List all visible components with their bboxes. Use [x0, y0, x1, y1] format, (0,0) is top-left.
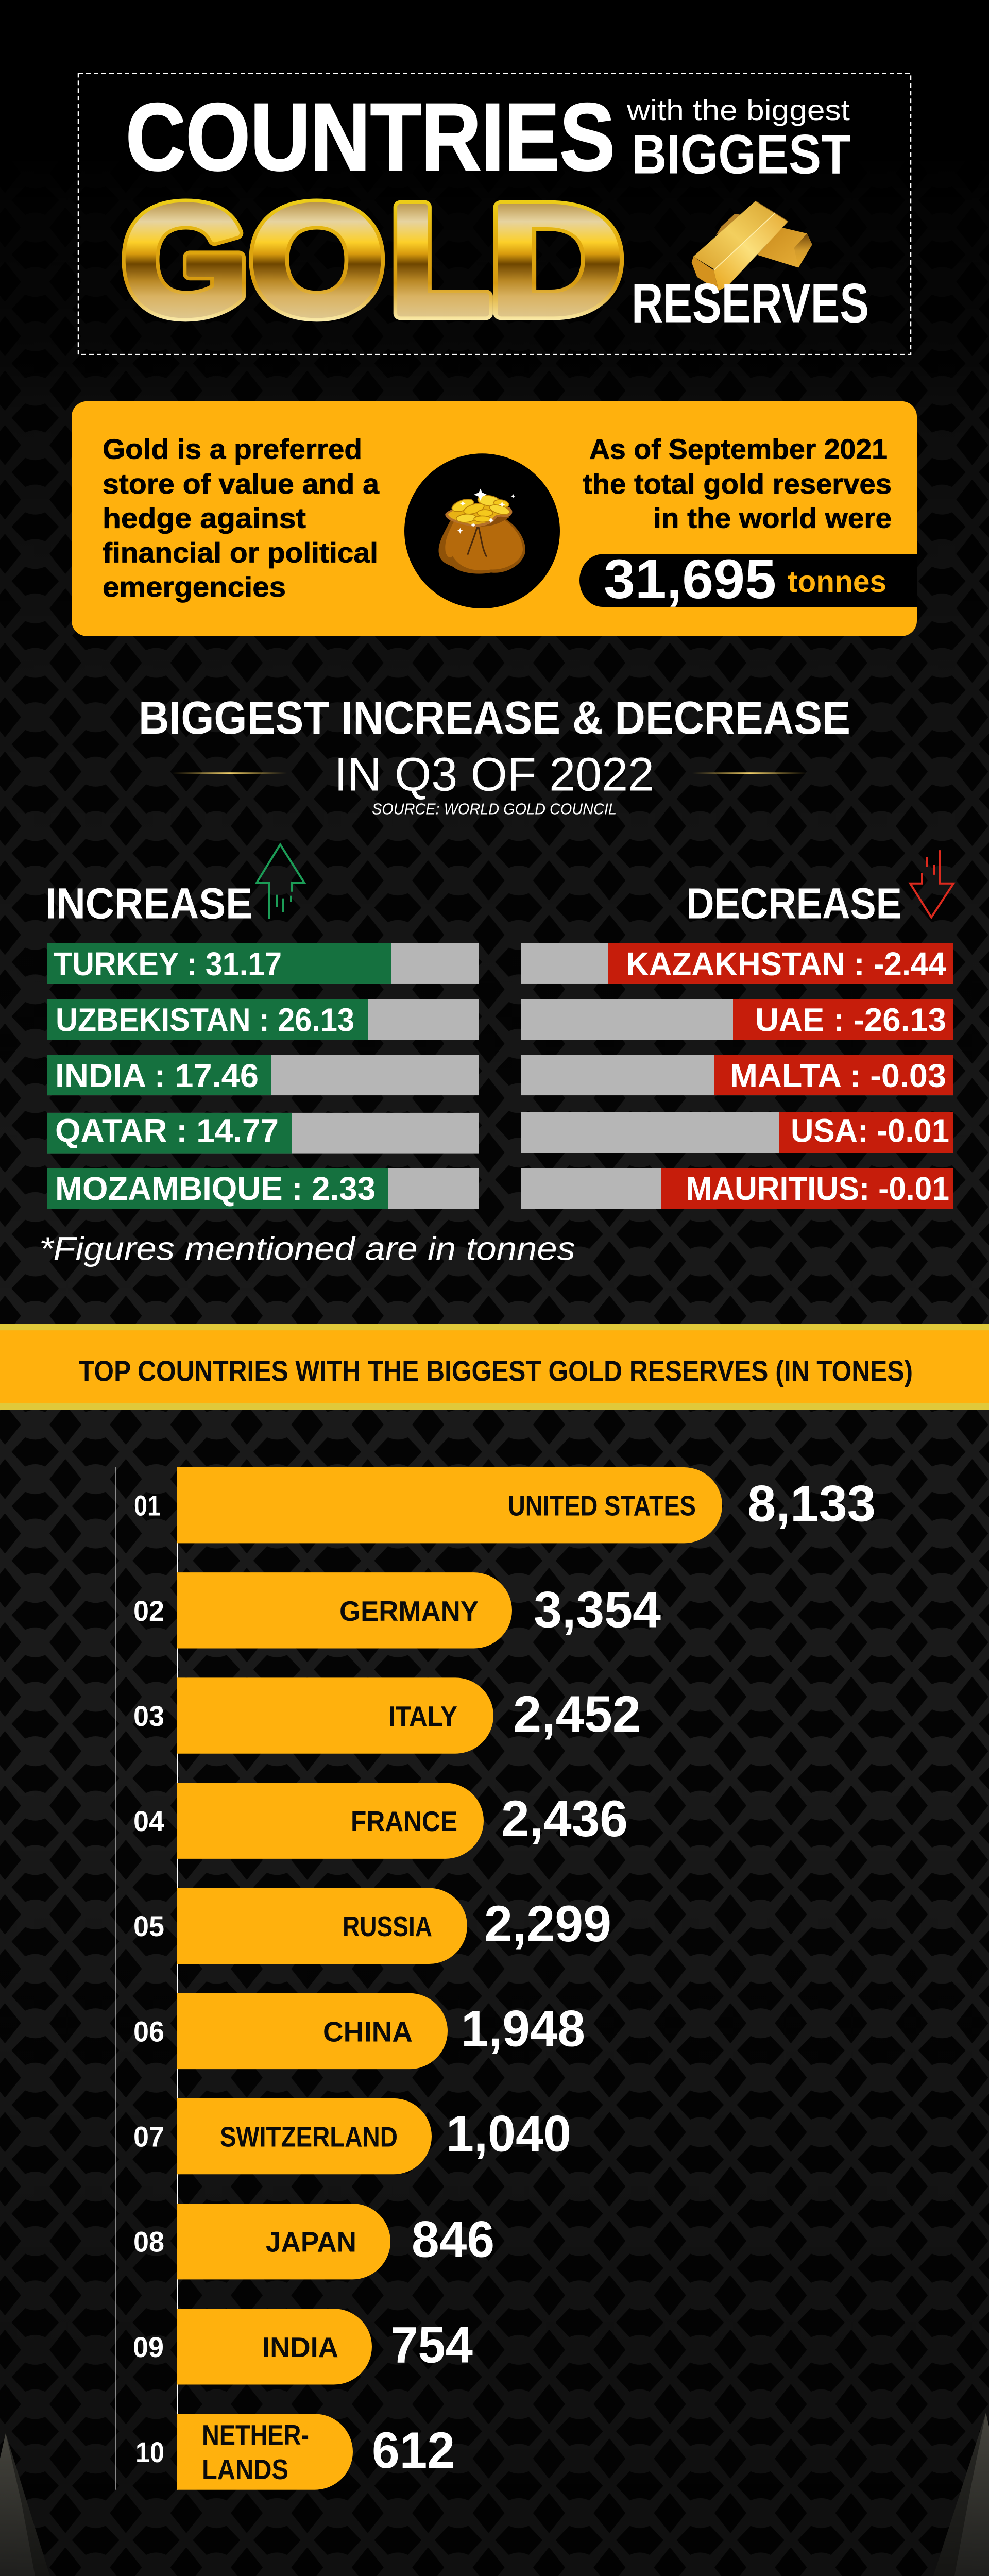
- text block: as of September 2021: [583, 433, 892, 534]
- row 03: Italy: 2,452: [513, 1686, 641, 1743]
- row 08: Japan: JAPAN: [266, 2226, 356, 2258]
- bar: Kazakhstan: [521, 943, 953, 984]
- bar: Malta: [521, 1055, 953, 1095]
- text block: gold is a preferred store: hedge against: [103, 502, 306, 534]
- bar: Mozambique: MOZAMBIQUE : 2.33: [55, 1170, 376, 1207]
- title: GOLD metallic lettering: L: [389, 173, 491, 346]
- callout: total reserves figure: [579, 548, 917, 610]
- heading: decrease: DECREASE: [686, 879, 902, 927]
- bar: Turkey: TURKEY : 31.17: [54, 945, 282, 982]
- bar: Uzbekistan: UZBEKISTAN : 26.13: [56, 1002, 354, 1039]
- row 01: United States: [134, 1467, 876, 1543]
- row 09: India: 09: [133, 2331, 164, 2363]
- row 08: Japan: 08: [133, 2226, 164, 2258]
- row 09: India: 754: [390, 2317, 473, 2374]
- row 02: Germany: 02: [133, 1595, 164, 1627]
- row 08: Japan: 846: [412, 2211, 494, 2268]
- row 04: France: FRANCE: [351, 1805, 457, 1837]
- row 10: Netherlands: LANDS: [202, 2453, 288, 2485]
- text block: gold is a preferred store: Gold is a preferred: [103, 433, 362, 465]
- title: GOLD metallic lettering: G: [122, 173, 249, 346]
- heading: biggest increase and decrease: BIGGEST INCREASE & DECREASE: [139, 692, 850, 744]
- row 01: United States: UNITED STATES: [508, 1490, 696, 1522]
- row 04: France: 2,436: [501, 1790, 628, 1848]
- bar: Mozambique: [47, 1168, 479, 1209]
- row 07: Switzerland: SWITZERLAND: [220, 2121, 398, 2153]
- row 03: Italy: ITALY: [388, 1700, 457, 1732]
- row 02: Germany: [133, 1572, 661, 1649]
- text block: as of September 2021: in the world were: [653, 502, 892, 534]
- info panel: [72, 401, 917, 636]
- title: COUNTRIES: COUNTRIES: [126, 84, 615, 191]
- column: increase: [45, 844, 479, 1209]
- row 04: France: [133, 1783, 628, 1859]
- text block: gold is a preferred store: [103, 433, 379, 603]
- title: GOLD metallic lettering: O: [249, 173, 385, 346]
- text block: gold is a preferred store: emergencies: [103, 571, 286, 603]
- title: GOLD metallic lettering: [122, 173, 624, 346]
- source note: SOURCE: WORLD GOLD COUNCIL: [372, 800, 617, 818]
- bar: Malta: MALTA : -0.03: [730, 1057, 946, 1094]
- bar: Qatar: QATAR : 14.77: [55, 1112, 279, 1149]
- bar: UAE: [521, 999, 953, 1040]
- bottom-left corner shard: [0, 2433, 50, 2576]
- text block: as of September 2021: As of September 2021: [589, 433, 888, 465]
- row 10: Netherlands: 612: [372, 2422, 455, 2479]
- row 03: Italy: [133, 1677, 641, 1754]
- unit: tonnes: tonnes: [788, 564, 886, 599]
- row 06: China: CHINA: [323, 2015, 413, 2047]
- row 05: Russia: [133, 1888, 611, 1964]
- title: RESERVES: RESERVES: [632, 272, 869, 334]
- row 05: Russia: 2,299: [484, 1895, 611, 1953]
- row 10: Netherlands: 10: [135, 2436, 164, 2468]
- icon: gold bars: [692, 201, 812, 291]
- bar: UAE: UAE : -26.13: [755, 1002, 946, 1039]
- title: GOLD metallic lettering: O: [249, 173, 385, 346]
- row 09: India: [133, 2309, 473, 2385]
- text block: gold is a preferred store: financial or political: [103, 537, 378, 568]
- row 07: Switzerland: 07: [133, 2121, 164, 2153]
- footnote: figures in tonnes: *Figures mentioned are in tonnes: [39, 1230, 575, 1267]
- bar: Uzbekistan: [47, 999, 479, 1040]
- title: GOLD metallic lettering: D: [489, 173, 624, 346]
- banner: top countries heading: [0, 1324, 989, 1410]
- row 02: Germany: 3,354: [534, 1582, 661, 1639]
- row 01: United States: 8,133: [747, 1476, 876, 1533]
- text block: gold is a preferred store: store of value and a: [103, 468, 379, 500]
- row 06: China: [133, 1993, 585, 2069]
- title: with the biggest: with the biggest: [626, 94, 850, 126]
- bar: USA: [521, 1112, 953, 1153]
- heading: biggest increase and decrease: [139, 692, 850, 818]
- row 05: Russia: RUSSIA: [343, 1910, 432, 1942]
- title box: [78, 73, 911, 354]
- title: BIGGEST: BIGGEST: [632, 123, 851, 185]
- icon: black circle with bag of gold coins: [404, 453, 560, 608]
- icon: green up arrow: [257, 844, 304, 919]
- title: GOLD metallic lettering: D: [489, 173, 624, 346]
- row 05: Russia: 05: [133, 1910, 164, 1942]
- row 01: United States: 01: [134, 1489, 161, 1522]
- row 03: Italy: 03: [133, 1700, 164, 1732]
- row 10: Netherlands: [135, 2414, 455, 2490]
- row 04: France: 04: [133, 1805, 164, 1837]
- bar: USA: USA: -0.01: [791, 1112, 949, 1149]
- bar: Kazakhstan: KAZAKHSTAN : -2.44: [626, 945, 946, 982]
- row 02: Germany: GERMANY: [339, 1595, 479, 1627]
- row 07: Switzerland: 1,040: [446, 2106, 571, 2162]
- row 09: India: INDIA: [262, 2331, 338, 2363]
- heading: increase: INCREASE: [45, 879, 252, 927]
- title: GOLD metallic lettering: L: [389, 173, 491, 346]
- bar: Turkey: [47, 943, 479, 984]
- row 08: Japan: [133, 2204, 494, 2279]
- row 07: Switzerland: [133, 2098, 571, 2174]
- chart: top 10 gold reserves: [115, 1467, 876, 2490]
- bar: India: [47, 1055, 479, 1095]
- number: 31,695: 31,695: [604, 548, 776, 610]
- bar: Qatar: [47, 1112, 479, 1154]
- bar: India: INDIA : 17.46: [55, 1057, 259, 1094]
- bar: Mauritius: MAURITIUS: -0.01: [686, 1170, 949, 1207]
- column: decrease: [521, 850, 953, 1209]
- row 06: China: 06: [133, 2015, 164, 2047]
- row 06: China: 1,948: [461, 2001, 585, 2057]
- title: GOLD metallic lettering: G: [122, 173, 249, 346]
- bar: Mauritius: [521, 1168, 953, 1209]
- icon: red down arrow: [910, 850, 953, 918]
- text block: as of September 2021: the total gold reserves: [583, 468, 892, 500]
- row 10: Netherlands: NETHER-: [202, 2419, 309, 2451]
- subheading: in Q3 of 2022: IN Q3 OF 2022: [334, 749, 654, 801]
- bottom-right corner shard: [933, 2413, 989, 2576]
